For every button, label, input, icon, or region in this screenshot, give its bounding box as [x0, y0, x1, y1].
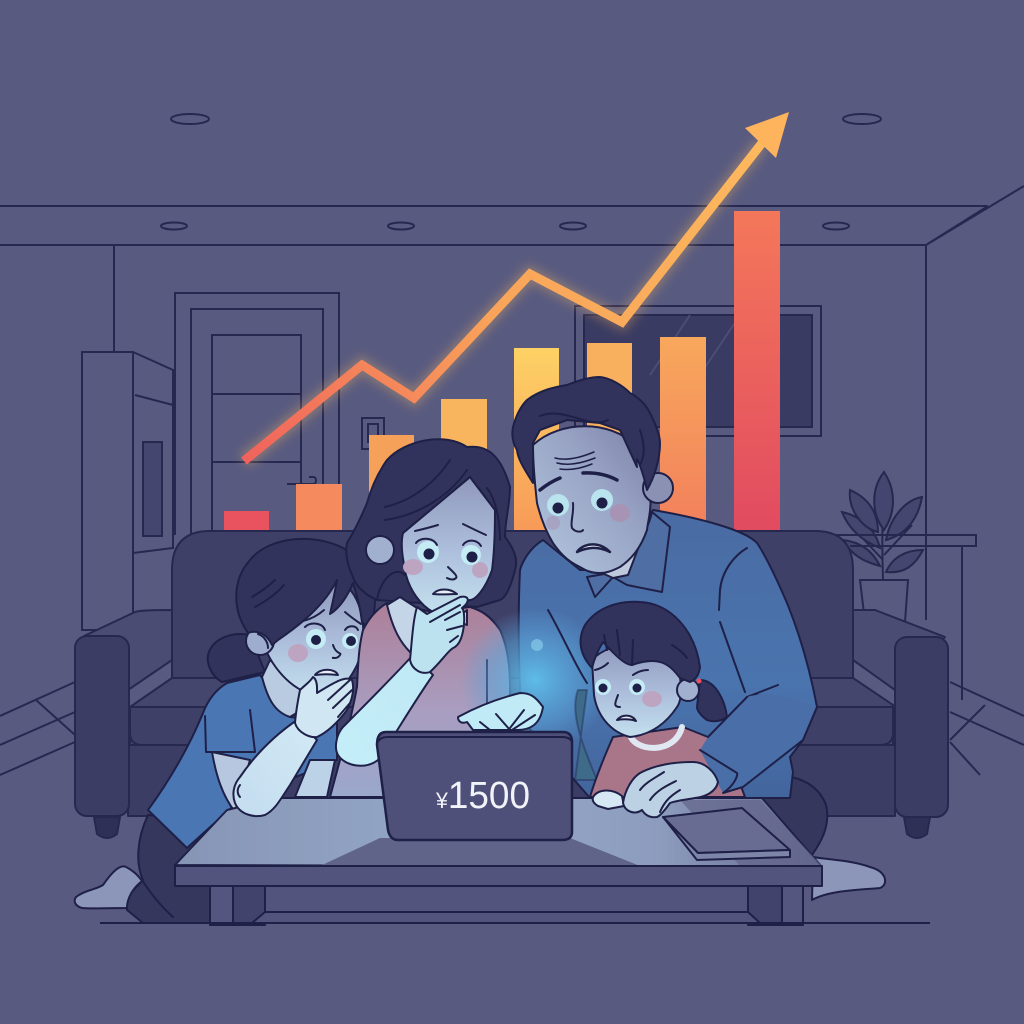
mother collar	[387, 597, 467, 652]
coffee table	[100, 798, 930, 925]
girl hair	[236, 539, 375, 645]
mother eyes	[417, 541, 439, 563]
daughter ponytail	[697, 680, 727, 721]
mother	[330, 439, 516, 797]
mother arm	[336, 655, 433, 766]
father pointing hand	[458, 693, 543, 730]
sofa	[75, 531, 948, 838]
mother hair	[346, 439, 516, 607]
table top	[175, 798, 822, 867]
girl white belly	[295, 760, 335, 797]
arm tops	[84, 610, 172, 690]
girl eyes	[306, 629, 326, 649]
father's hand	[623, 762, 718, 817]
father's forearm	[700, 694, 817, 793]
ceiling lights	[161, 114, 881, 230]
mother hand	[410, 597, 468, 673]
plant	[842, 472, 923, 622]
sofa back	[172, 531, 853, 690]
mother face	[402, 477, 495, 612]
laptop	[377, 732, 572, 840]
older girl	[148, 539, 375, 848]
wall TV	[575, 306, 821, 436]
daughter hair	[581, 602, 700, 682]
seat	[130, 678, 893, 745]
daughter body	[590, 727, 745, 797]
price: ¥1500	[435, 775, 530, 817]
father collar	[587, 512, 670, 597]
father's knee and foot	[745, 776, 885, 900]
door	[175, 293, 339, 535]
wall switch	[362, 418, 384, 449]
table legs	[210, 885, 803, 925]
father	[458, 377, 817, 798]
girl shirt	[148, 675, 337, 848]
fridge	[82, 352, 173, 630]
girl face	[262, 581, 363, 695]
older girl's arm and hand	[233, 677, 353, 816]
daughter eyes	[595, 679, 611, 695]
side table	[835, 535, 976, 700]
daughter's hand	[593, 790, 624, 809]
girl neck and collar	[262, 660, 318, 717]
trend arrow	[244, 112, 789, 461]
younger daughter	[581, 602, 745, 797]
father hair	[512, 377, 660, 490]
daughter face	[592, 644, 681, 737]
girl ponytail	[208, 634, 265, 682]
bar chart	[224, 211, 780, 531]
mother body	[330, 603, 510, 797]
father face	[533, 426, 651, 573]
father sweater	[519, 510, 817, 798]
father eyes	[547, 494, 569, 516]
sofa arms	[75, 636, 129, 816]
room outline	[0, 114, 1024, 775]
father forehead wrinkles	[555, 452, 595, 469]
notebook	[663, 808, 790, 860]
girl legs and foot	[75, 815, 270, 923]
